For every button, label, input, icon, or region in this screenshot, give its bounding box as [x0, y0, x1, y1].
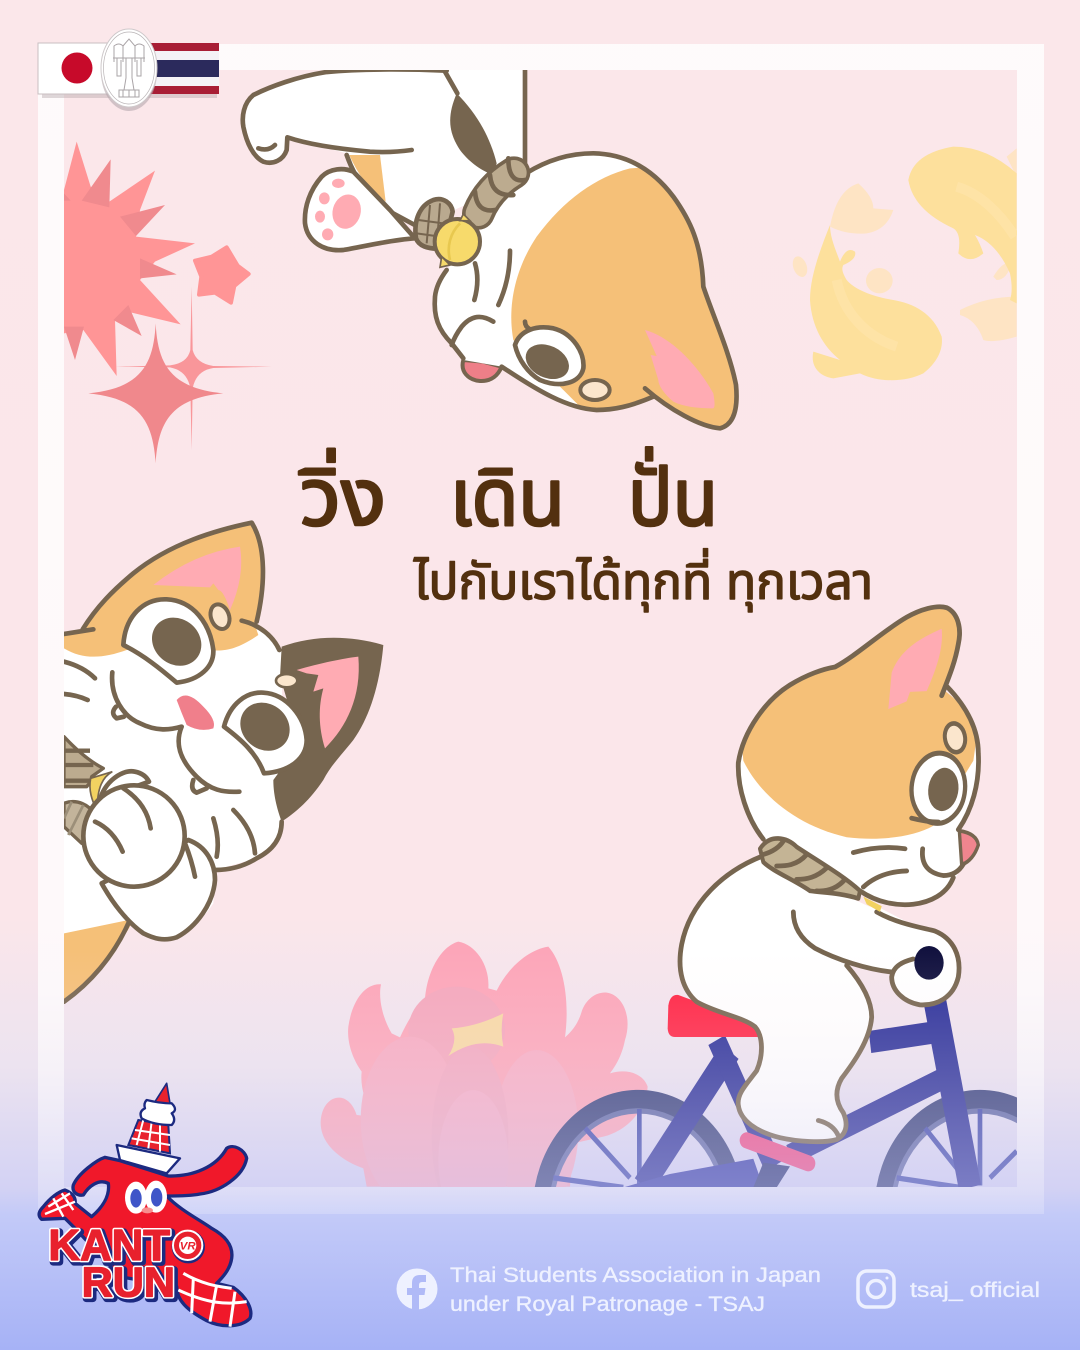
left wheel [534, 1090, 735, 1187]
cat: peeking from the left, paws together [64, 522, 383, 1002]
head [437, 156, 638, 404]
rope [760, 838, 860, 899]
cat: riding the bicycle [680, 600, 997, 1142]
right wheel [876, 1090, 1017, 1187]
head fill [64, 629, 282, 934]
logo text: KANTO: KANT [50, 1223, 172, 1272]
muzzle lines [452, 317, 493, 345]
orange patch [511, 168, 734, 426]
facebook page name [450, 1264, 821, 1316]
bell [435, 219, 480, 264]
saddle [668, 995, 758, 1037]
head [740, 747, 976, 902]
title [298, 447, 718, 542]
logo: Kanto VR Run mascot [39, 1083, 251, 1327]
tail [64, 920, 130, 999]
association seal [101, 29, 157, 111]
facebook page name: Thai Students Association in Japan [450, 1264, 821, 1287]
instagram handle: tsaj_ official [910, 1279, 1040, 1302]
nose [177, 695, 214, 730]
logo text: RUN: RUN [82, 1259, 175, 1306]
starburst and sparkles [64, 142, 272, 463]
flags and seal [38, 29, 219, 111]
eye [909, 750, 968, 826]
flag: Japan [38, 43, 118, 94]
lotus flower [320, 942, 648, 1187]
mouth [112, 672, 239, 792]
arm [850, 906, 956, 1002]
logo text: RUN: RUN [84, 1261, 177, 1308]
hand net [45, 1193, 75, 1217]
body [680, 856, 877, 1142]
logo text: KANTO: VR [180, 1240, 196, 1252]
cat: hanging from the top with bell [243, 69, 763, 443]
orange head [64, 523, 263, 657]
pedal [747, 1140, 808, 1163]
icon: facebook [396, 1268, 438, 1310]
flag: Thailand [140, 43, 219, 94]
eyes [123, 599, 213, 683]
tongue [463, 360, 502, 381]
mascot body [39, 1147, 251, 1326]
title: ปั่น [628, 447, 718, 542]
shell [415, 199, 453, 249]
hind paw [305, 169, 415, 250]
icon: instagram [858, 1271, 894, 1307]
body [243, 70, 525, 227]
logo text: KANTO: KANT [48, 1221, 170, 1270]
face [125, 1181, 167, 1214]
bicycle [534, 994, 1017, 1187]
paws [102, 840, 215, 939]
shadow [42, 92, 217, 98]
bottom fade over artwork [64, 950, 1017, 1187]
dark ear [273, 638, 383, 822]
subtitle: ไปกับเราได้ทุกที่ ทุกเวลา [413, 548, 873, 612]
rope [64, 737, 103, 787]
title: เดิน [450, 453, 565, 542]
foot net [178, 1273, 247, 1327]
title: วิ่ง [298, 449, 386, 542]
logo text: KANTO: KANT [48, 1221, 170, 1270]
eye [515, 327, 583, 384]
facebook page name: under Royal Patronage - TSAJ [450, 1293, 765, 1316]
logo text: RUN: RUN [82, 1259, 175, 1306]
tower hat [117, 1083, 180, 1173]
koi fish [790, 147, 1017, 380]
frame [643, 1052, 730, 1186]
nose [959, 831, 978, 865]
rope collar [478, 173, 514, 213]
